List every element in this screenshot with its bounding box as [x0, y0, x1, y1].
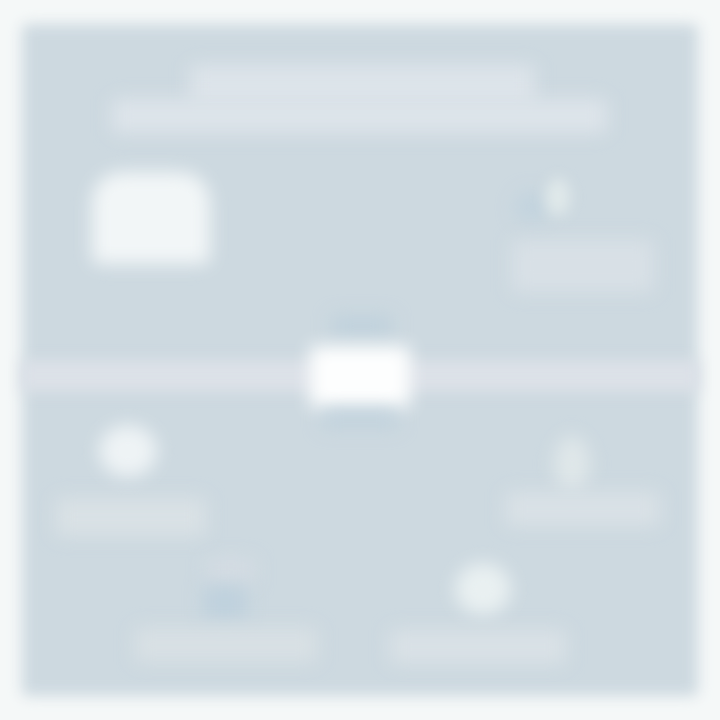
text block: middle right [506, 492, 660, 526]
center accent below [322, 410, 398, 428]
title line 1 [190, 65, 535, 105]
text block: top right [512, 240, 654, 292]
icon lower dark [203, 585, 247, 619]
icon shadow [515, 192, 547, 222]
center band [20, 360, 700, 392]
icon upper light [207, 559, 255, 585]
title block [113, 66, 606, 132]
text block: bottom left [135, 628, 317, 662]
icon highlight [546, 178, 570, 216]
icon: bottom right [455, 563, 511, 615]
icon: white building top left [92, 172, 210, 264]
text block: bottom right [390, 630, 566, 664]
title line 2 [112, 99, 607, 133]
center white box [310, 346, 410, 408]
icon: top right [525, 180, 570, 214]
icon: circle left [99, 425, 157, 477]
icon: right [554, 436, 590, 492]
text block: middle left [56, 498, 206, 536]
icon: bottom left [204, 588, 246, 616]
center accent above [332, 316, 392, 336]
